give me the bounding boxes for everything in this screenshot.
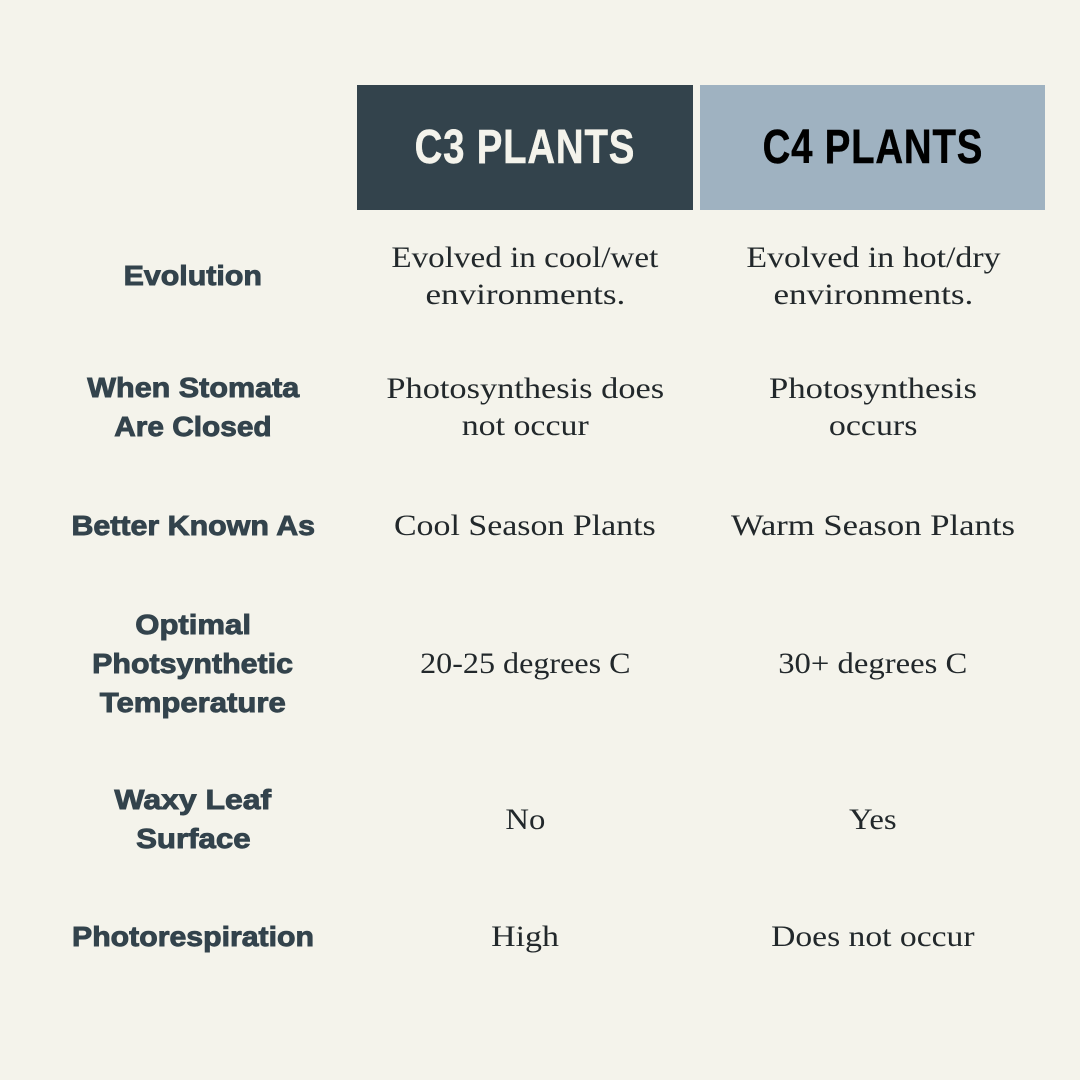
C3 photorespiration: High bbox=[491, 920, 559, 953]
C4 photorespiration: Does not occur bbox=[771, 920, 975, 953]
C4 evolution bbox=[746, 241, 1000, 311]
C3 known as: Cool Season Plants bbox=[394, 509, 656, 542]
C4 temperature: 30+ degrees C bbox=[778, 647, 968, 680]
C4 evolution: environments. bbox=[773, 278, 973, 311]
header: C4 plants: C4 PLANTS bbox=[762, 121, 983, 174]
row label: When Stomata Are Closed bbox=[86, 372, 300, 442]
C3 evolution bbox=[392, 241, 658, 311]
C4 waxy: Yes bbox=[849, 803, 897, 836]
row label: Optimal Photosynthetic Temperature bbox=[93, 609, 293, 718]
C3 waxy: No bbox=[505, 803, 545, 836]
C4 stomata: Photosynthesis bbox=[769, 372, 977, 405]
C3 temperature: 20-25 degrees C bbox=[420, 647, 630, 680]
row label: Photorespiration: Photorespiration bbox=[72, 921, 314, 952]
header: C4 plants bbox=[700, 85, 1045, 210]
C4 stomata bbox=[769, 372, 977, 442]
C4 evolution: Evolved in hot/dry bbox=[746, 241, 1000, 274]
row label: Optimal Photosynthetic Temperature: Temperature bbox=[100, 687, 286, 718]
row label: Waxy Leaf Surface: Waxy Leaf bbox=[115, 784, 271, 815]
row label: Waxy Leaf Surface: Surface bbox=[136, 823, 250, 854]
C3 evolution: environments. bbox=[425, 278, 625, 311]
C3 stomata bbox=[386, 372, 664, 442]
row label: When Stomata Are Closed: Are Closed bbox=[114, 411, 272, 442]
C3 stomata: not occur bbox=[461, 409, 589, 442]
row label: Optimal Photosynthetic Temperature: Photsynthetic bbox=[93, 648, 293, 679]
row label: Waxy Leaf Surface bbox=[114, 784, 272, 854]
row label: When Stomata Are Closed: When Stomata bbox=[87, 372, 299, 403]
row label: Optimal Photosynthetic Temperature: Optimal bbox=[135, 609, 251, 640]
row label: Better Known As: Better Known As bbox=[71, 510, 315, 541]
row label: Evolution: Evolution bbox=[124, 260, 262, 291]
C4 known as: Warm Season Plants bbox=[731, 509, 1015, 542]
C4 stomata: occurs bbox=[829, 409, 917, 442]
header: C3 plants bbox=[357, 85, 693, 210]
C3 stomata: Photosynthesis does bbox=[386, 372, 664, 405]
header: C3 plants: C3 PLANTS bbox=[415, 121, 635, 174]
C3 evolution: Evolved in cool/wet bbox=[392, 241, 658, 274]
